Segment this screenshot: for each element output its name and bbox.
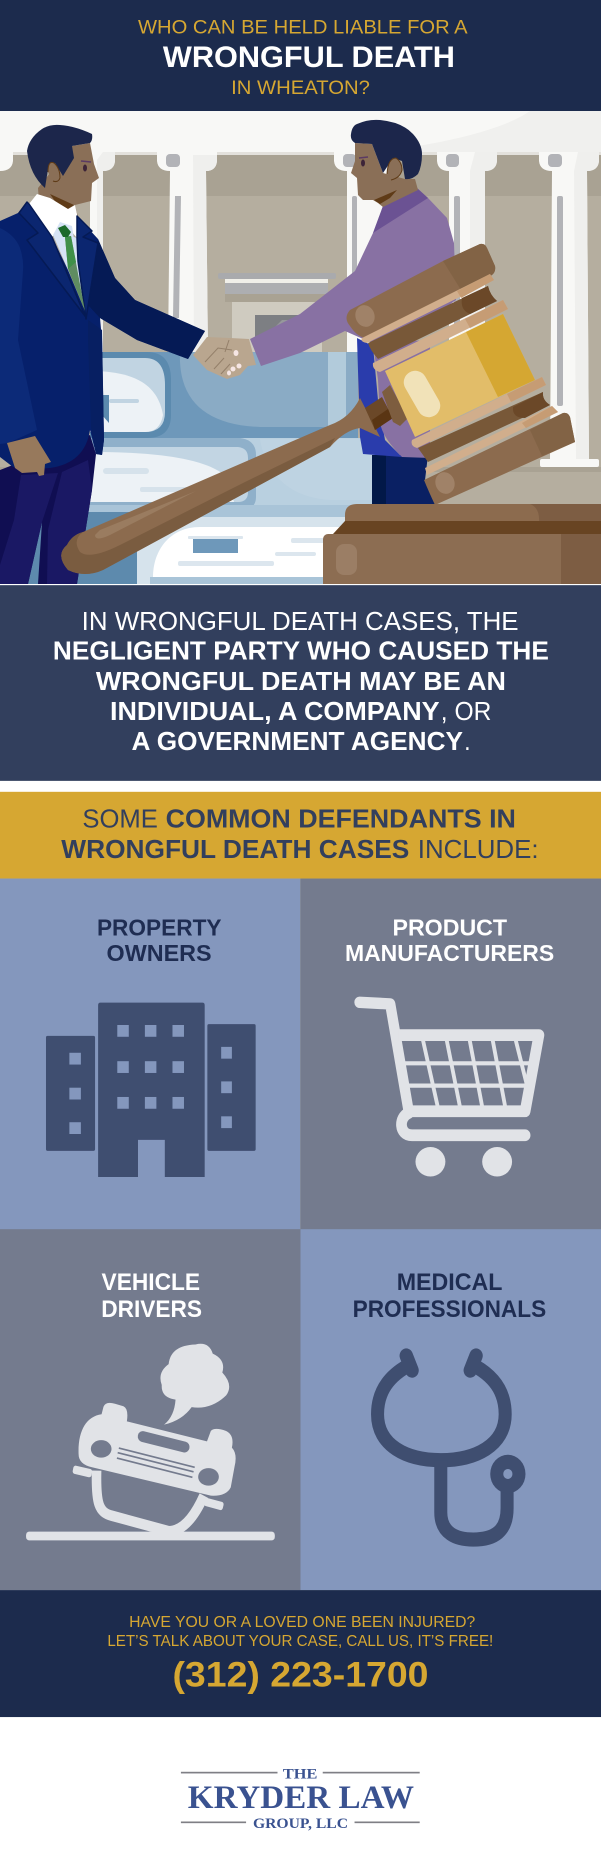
panel: common defendants heading <box>0 792 601 879</box>
panel: product manufacturers: PRODUCT <box>392 914 507 941</box>
call to action banner: (312) 223-1700 <box>172 1656 429 1695</box>
icon: overturned car with smoke <box>26 1344 275 1540</box>
logo: The Kryder Law Group, LLC: GROUP, LLC <box>253 1816 348 1832</box>
panel: negligent party statement: A GOVERNMENT AGENCY <box>131 728 463 756</box>
panel: negligent party statement: NEGLIGENT PARTY WHO CAUSED THE <box>53 638 549 666</box>
panel: common defendants heading: INCLUDE: <box>418 836 539 864</box>
illustration: handshake in front of courthouse with law books and gavel <box>0 111 601 594</box>
man on the right in purple suit <box>250 120 456 505</box>
panel: property owners: PROPERTY <box>97 914 222 941</box>
panel: property owners <box>0 879 300 1230</box>
man on the left in navy suit <box>0 125 205 584</box>
panel: common defendants heading: SOME <box>82 806 158 834</box>
title banner: WHO CAN BE HELD LIABLE FOR A <box>138 18 468 39</box>
panel: negligent party statement: WRONGFUL DEATH MAY BE AN <box>96 668 506 696</box>
panel: vehicle drivers: VEHICLE <box>102 1268 200 1295</box>
icon: office buildings <box>46 1003 256 1177</box>
title banner: WRONGFUL DEATH <box>163 41 455 74</box>
panel: medical professionals <box>300 1229 601 1590</box>
gavel head <box>346 244 575 505</box>
panel: common defendants heading: WRONGFUL DEATH CASES <box>61 836 409 864</box>
panel: negligent party statement <box>0 585 601 781</box>
courthouse background <box>0 111 601 505</box>
panel: product manufacturers <box>300 879 601 1230</box>
title banner <box>0 0 601 111</box>
panel: vehicle drivers: DRIVERS <box>101 1295 202 1322</box>
logo: The Kryder Law Group, LLC <box>181 1766 420 1832</box>
panel: common defendants heading: COMMON DEFENDANTS IN <box>166 806 516 834</box>
panel: product manufacturers: MANUFACTURERS <box>345 940 554 966</box>
panel: medical professionals: PROFESSIONALS <box>353 1295 546 1322</box>
sound block <box>323 504 601 584</box>
gavel <box>61 244 601 594</box>
icon: stethoscope <box>378 1356 525 1540</box>
stack of law books <box>28 352 375 584</box>
panel: medical professionals: MEDICAL <box>397 1268 503 1295</box>
shaking hands <box>193 337 256 379</box>
panel: negligent party statement: , OR <box>441 698 491 726</box>
logo: The Kryder Law Group, LLC: KRYDER LAW <box>188 1779 414 1815</box>
distant building <box>218 273 336 354</box>
title banner: IN WHEATON? <box>231 78 370 99</box>
panel: property owners: OWNERS <box>107 940 212 966</box>
call to action banner: LET’S TALK ABOUT YOUR CASE, CALL US, IT’S FREE! <box>107 1634 493 1650</box>
gavel handle <box>61 385 408 574</box>
call to action banner: HAVE YOU OR A LOVED ONE BEEN INJURED? <box>129 1615 475 1631</box>
logo: The Kryder Law Group, LLC: THE <box>283 1766 317 1783</box>
call to action banner <box>0 1590 601 1717</box>
panel: negligent party statement: INDIVIDUAL, A COMPANY <box>110 698 440 726</box>
panel: vehicle drivers <box>0 1229 300 1590</box>
icon: shopping cart <box>360 1002 539 1177</box>
panel: negligent party statement: . <box>464 728 471 756</box>
panel: negligent party statement: IN WRONGFUL DEATH CASES, THE <box>82 608 519 636</box>
